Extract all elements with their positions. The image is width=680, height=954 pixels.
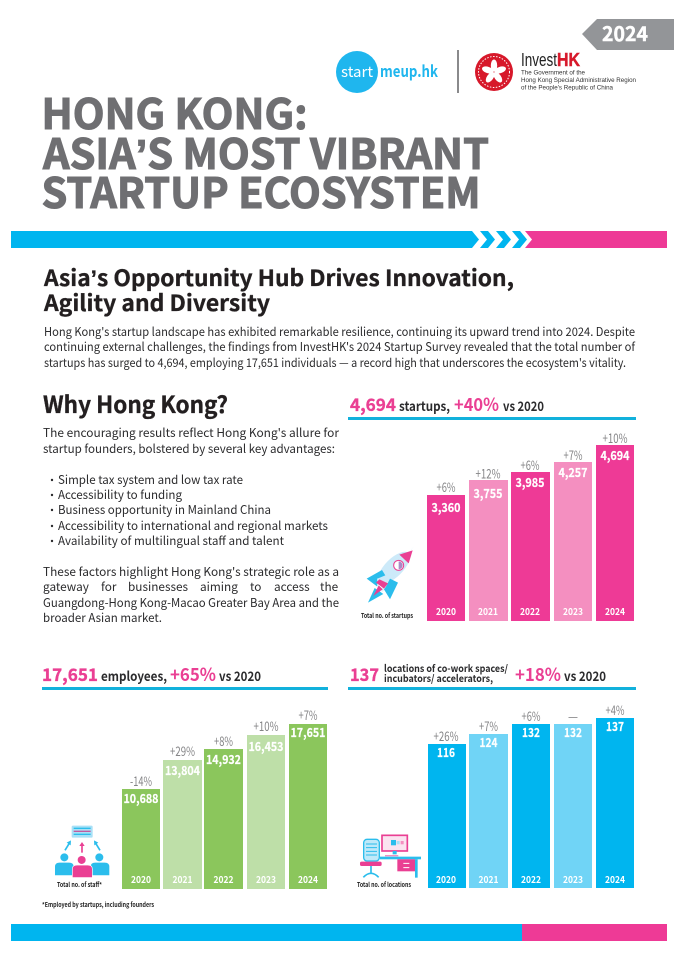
bar: 2021 startups: [469, 464, 508, 621]
text: gateway paragraph: broader Asian market.: [43, 609, 162, 626]
bar: 2021 startups: +12%: [476, 464, 501, 482]
list: key advantages: Simple tax system and low tax rate: [58, 471, 243, 488]
logo: InvestHK: The Government of the: [521, 70, 585, 76]
logo: startmeup.hk: [336, 51, 438, 93]
heading: Asia's Opportunity Hub: [43, 261, 514, 318]
title: HONG KONG:: [42, 81, 308, 142]
label: total startups: Total no. of startups: [361, 610, 413, 620]
bar: 2024 locations: 2024: [605, 872, 625, 886]
icon: desk: [360, 835, 421, 878]
bar: 2023 startups: 2023: [563, 604, 583, 618]
bar: 2023 locations: [554, 706, 592, 888]
bar: 2024 startups: 2024: [605, 604, 625, 618]
text: why Hong Kong lead-in: startup founders, bolstered by several key advantages:: [43, 440, 335, 457]
logo: Hong Kong emblem: [475, 53, 513, 91]
list: key advantages: Availability of multilingual staff and talent: [58, 532, 285, 549]
chart heading: startups: +40%: [454, 391, 499, 417]
text: gateway paragraph: the: [320, 578, 339, 595]
bar: 2020 locations: 116: [437, 742, 455, 761]
bar: 2021 startups: 2021: [478, 604, 498, 618]
bar: 2020 employees: [122, 771, 160, 889]
panel: startups chart: [348, 391, 636, 621]
bar: 2024 locations: +4%: [606, 700, 625, 719]
bar: 2023 locations: 132: [564, 722, 582, 741]
bar: 2024 employees: 2024: [298, 872, 318, 886]
bar: 2021 locations: +7%: [479, 716, 498, 735]
text: why Hong Kong lead-in: [43, 424, 339, 457]
bar: 2023 locations: —: [568, 706, 578, 725]
logo: startmeup.hk: start: [341, 61, 373, 82]
bar: 2023 employees: 16,453: [248, 736, 284, 755]
bar: 2021 employees: +29%: [170, 741, 195, 760]
bar: 2023 startups: +7%: [564, 445, 583, 464]
heading: Asia's Opportunity Hub: Agility and Diversity: [43, 286, 270, 318]
bar: 2021 employees: [163, 741, 202, 889]
panel: employees chart: [42, 661, 328, 909]
logo: startmeup.hk: meup.hk: [380, 58, 438, 82]
text: gateway paragraph: [43, 563, 339, 626]
bar: 2024 employees: [289, 705, 327, 889]
bar: 2024 startups: +10%: [602, 428, 628, 447]
bar: 2023 employees: 2023: [256, 872, 276, 886]
bar: 2022 startups: 3,985: [516, 472, 544, 491]
chart heading: employees: vs 2020: [219, 666, 261, 685]
bar: 2020 startups: +6%: [436, 477, 456, 496]
text: gateway paragraph: Guangdong-Hong Kong-Macao Greater Bay Area and the: [43, 594, 339, 611]
footer band: [11, 924, 667, 941]
bar: 2022 employees: 14,932: [206, 749, 241, 768]
text: gateway paragraph: aiming: [200, 578, 238, 595]
bar: 2024 locations: [596, 700, 634, 888]
chart heading: locations: +18%: [515, 661, 561, 687]
chart heading: locations: [348, 660, 636, 690]
text: gateway paragraph: for: [101, 578, 117, 595]
panel: locations chart: [348, 660, 636, 889]
chart heading: startups: vs 2020: [503, 396, 544, 415]
bar: 2022 startups: +6%: [520, 455, 540, 474]
intro paragraph: [44, 323, 636, 371]
bar: 2024 employees: +7%: [298, 705, 318, 724]
bar: 2020 employees: 10,688: [124, 788, 158, 807]
intro paragraph: startups has surged to 4,694, employing 17,651 individuals — a record high that underscores the ecosystem's vitality.: [44, 354, 626, 371]
chart heading: employees: [42, 661, 328, 690]
list: key advantages: Accessibility to international and regional markets: [58, 517, 328, 534]
bar: 2023 startups: 4,257: [558, 462, 588, 481]
icon: staff: [55, 826, 109, 878]
intro paragraph: Hong Kong's startup landscape has exhibited remarkable resilience, continuing its upward trend into 2024. Despite: [44, 323, 635, 340]
bar: 2021 startups: 3,755: [474, 483, 502, 502]
bar: 2022 employees: [204, 731, 243, 889]
chart heading: locations: 137: [350, 662, 379, 687]
chart heading: locations: vs 2020: [564, 666, 606, 685]
list: key advantages: Accessibility to funding: [58, 486, 182, 503]
bar: 2021 employees: 2021: [172, 872, 192, 886]
bar: 2022 employees: 2022: [214, 872, 234, 886]
text: why Hong Kong lead-in: The encouraging results reflect Hong Kong's allure for: [43, 424, 339, 441]
intro paragraph: continuing external challenges, the findings from InvestHK's 2024 Startup Survey revealed that the total number of: [44, 338, 636, 355]
bar: 2022 locations: [512, 706, 550, 888]
text: gateway paragraph: gateway: [43, 578, 89, 595]
label: total staff: Total no. of staff*: [57, 879, 102, 889]
bar: 2024 employees: 17,651: [290, 722, 326, 741]
chart heading: employees: 17,651: [42, 662, 98, 687]
bar: 2022 locations: 2022: [521, 872, 541, 886]
bar: 2021 locations: 2021: [478, 872, 498, 886]
bar: 2022 locations: 132: [522, 722, 540, 741]
year tag: 2024: [582, 18, 674, 50]
bar: 2023 startups: [554, 445, 592, 621]
bar: 2020 employees: -14%: [130, 771, 152, 790]
bar: 2020 startups: 2020: [436, 604, 456, 618]
logo: InvestHK: Invest: [521, 50, 557, 70]
text: gateway paragraph: to: [250, 578, 261, 595]
bar: 2022 locations: +6%: [522, 706, 541, 725]
bar: 2023 employees: +10%: [254, 716, 279, 735]
chart heading: employees: +65%: [170, 661, 216, 687]
year tag: 2024: 2024: [602, 18, 648, 47]
chart heading: employees: employees,: [101, 666, 167, 685]
top band with chevrons: [11, 231, 667, 248]
text: gateway paragraph: access: [274, 578, 310, 595]
bar: 2024 startups: [596, 428, 634, 621]
icon: rocket: [367, 546, 415, 603]
logo: InvestHK: HK: [557, 49, 581, 70]
chart heading: startups: 4,694: [350, 392, 396, 417]
bar: 2021 employees: 13,804: [165, 760, 201, 779]
bar: 2020 locations: 2020: [436, 872, 456, 886]
logo: InvestHK: [521, 49, 636, 92]
chart heading: locations: locations of co-work spaces/: [384, 660, 508, 675]
bar: 2022 startups: 2022: [520, 604, 540, 618]
chart heading: locations: incubators/ accelerators,: [384, 670, 493, 685]
title: STARTUP ECOSYSTEM: [42, 160, 480, 221]
bar: 2023 employees: [247, 716, 285, 889]
heading: Asia's Opportunity Hub: Asia’s Opportunity Hub Drives Innovation,: [43, 261, 514, 293]
bar: 2020 employees: 2020: [131, 872, 151, 886]
chart heading: startups: startups,: [399, 396, 450, 415]
logo: InvestHK: Hong Kong Special Administrative Region: [521, 77, 636, 84]
bar: 2022 employees: +8%: [214, 731, 233, 750]
bar: 2021 locations: [469, 716, 508, 888]
bar: 2024 startups: 4,694: [600, 445, 630, 464]
title: ASIA’S MOST VIBRANT: [42, 121, 489, 182]
bar: 2023 locations: 2023: [563, 872, 583, 886]
list: key advantages: [51, 471, 328, 549]
footnote: *Employed by startups, including founders: [42, 899, 154, 909]
text: gateway paragraph: businesses: [128, 578, 189, 595]
logo: InvestHK: of the People's Republic of China: [521, 84, 613, 92]
bar: 2020 locations: +26%: [434, 726, 459, 745]
bar: 2021 locations: 124: [480, 732, 498, 751]
text: gateway paragraph: These factors highlight Hong Kong's strategic role as a: [43, 563, 339, 580]
bar: 2024 locations: 137: [606, 716, 624, 735]
bar: 2020 startups: [427, 477, 465, 621]
list: key advantages: Business opportunity in Mainland China: [58, 501, 271, 518]
chart heading: startups: [348, 391, 636, 420]
label: total locations: Total no. of locations: [357, 879, 411, 889]
bar: 2020 startups: 3,360: [432, 497, 460, 516]
title: [42, 81, 489, 221]
bar: 2022 startups: [511, 455, 550, 621]
heading: Why Hong Kong?: Why Hong Kong?: [43, 386, 228, 420]
bar: 2020 locations: [428, 726, 466, 888]
